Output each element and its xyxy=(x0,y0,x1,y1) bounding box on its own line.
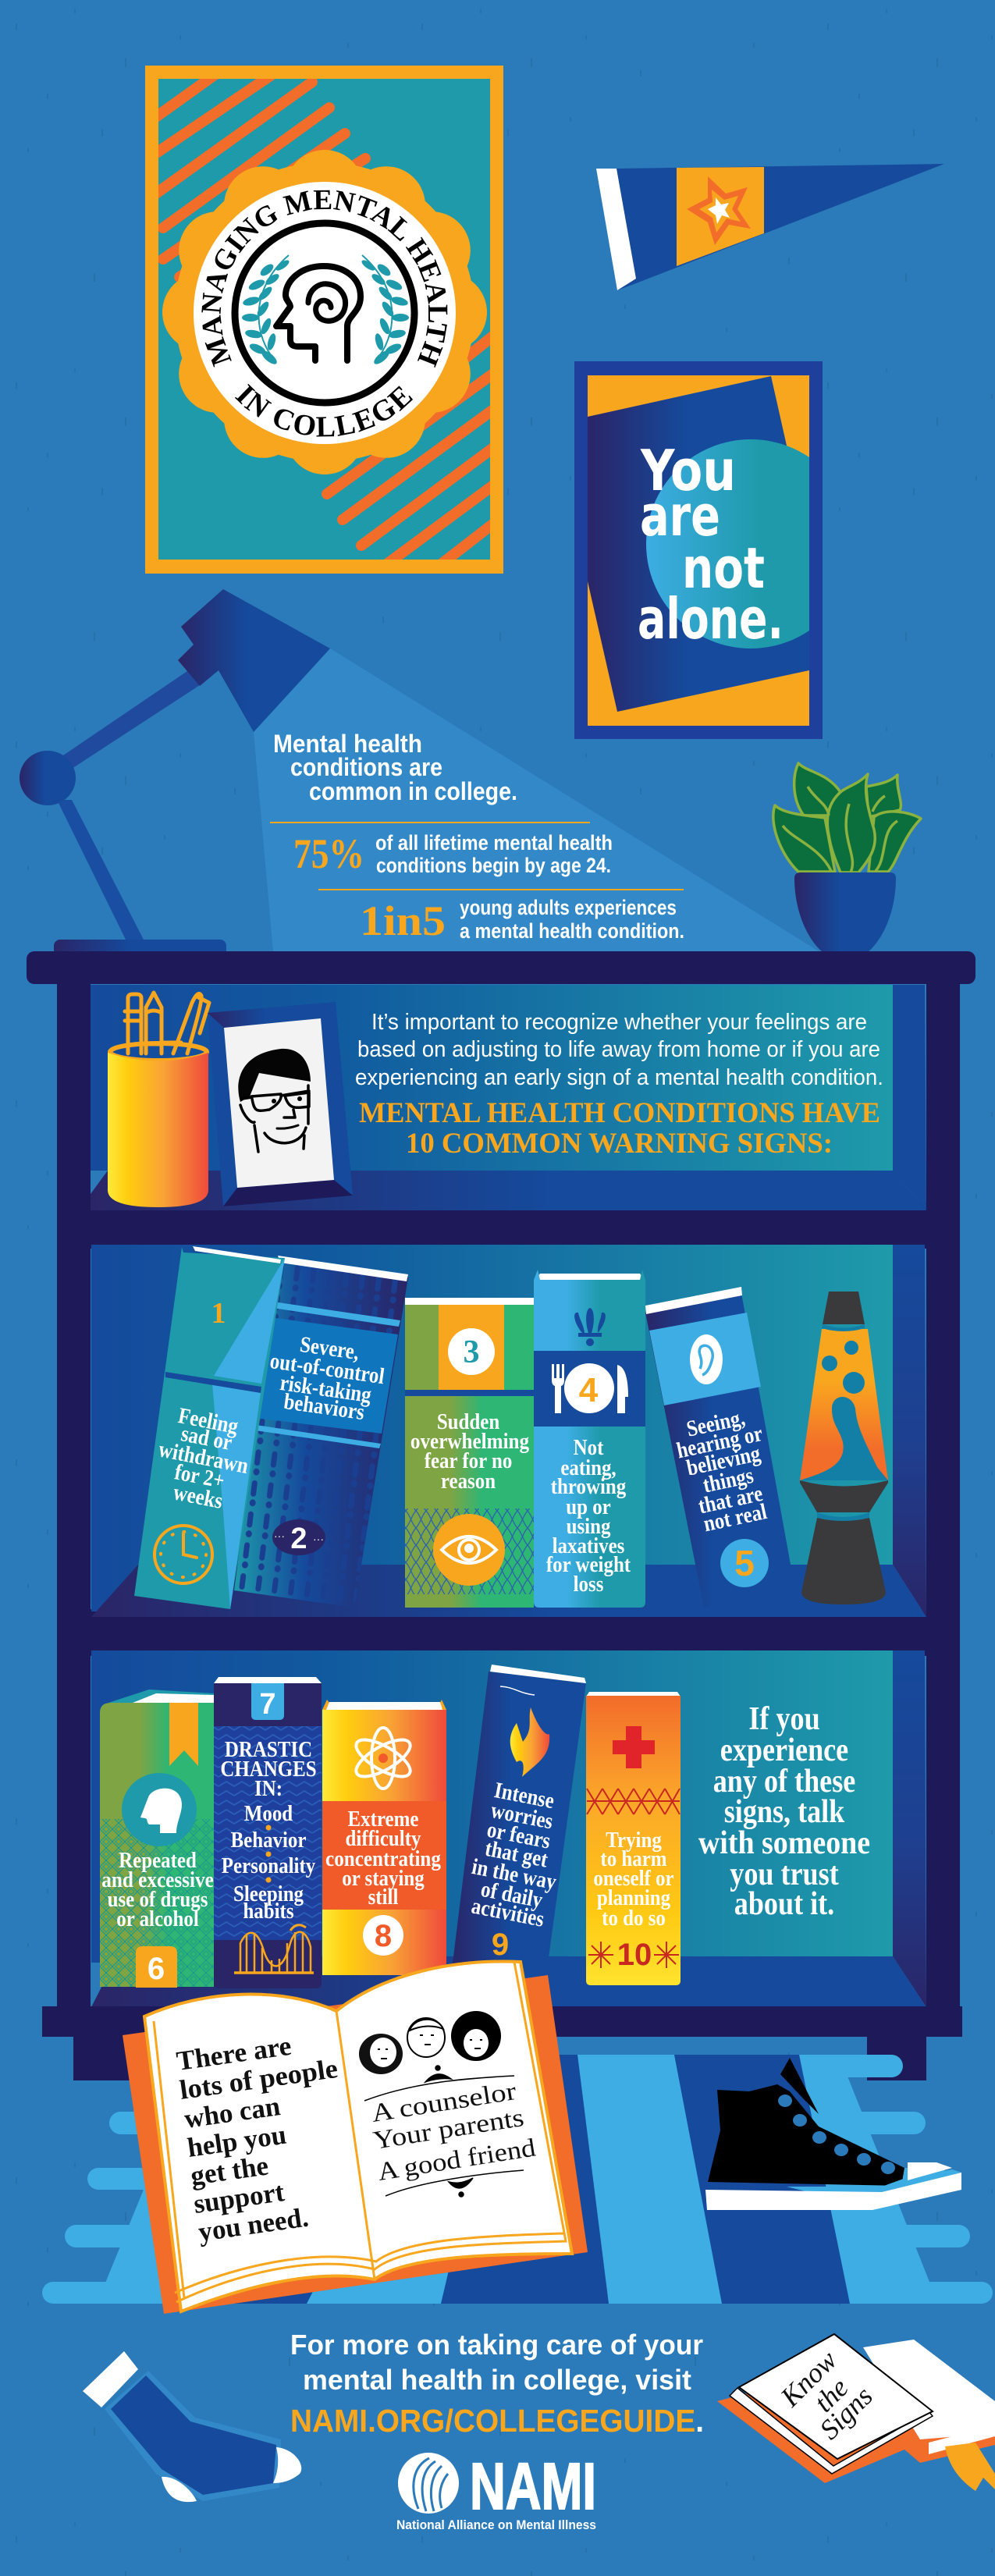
book 5 text xyxy=(674,1405,769,1537)
book 1 text: sad or xyxy=(179,1420,234,1455)
right page list: Your parents xyxy=(371,2104,526,2155)
book 4 text: loss xyxy=(574,1571,603,1596)
book 2 text: risk-taking xyxy=(279,1370,373,1408)
book 10 text: to do so xyxy=(602,1905,666,1930)
book 8 text: difficulty xyxy=(346,1825,421,1850)
statistics text block: conditions are xyxy=(290,753,442,781)
left page text: who can xyxy=(183,2091,282,2134)
book 2: risk-taking xyxy=(234,1256,408,1608)
footer text: For more on taking care of your xyxy=(290,2329,703,2361)
stat: 75 percent: conditions begin by age 24. xyxy=(376,854,611,877)
icon: red cross xyxy=(613,1726,655,1768)
book 10 text: Trying xyxy=(606,1827,662,1852)
book pages xyxy=(144,1962,572,2311)
book 8 text: still xyxy=(368,1884,399,1909)
book 5 number: 5 xyxy=(734,1543,755,1583)
poster lettering: alone. xyxy=(638,586,784,652)
intro paragraph: based on adjusting to life away from home or if you are xyxy=(357,1037,880,1062)
book 7 text: CHANGES xyxy=(220,1756,317,1781)
shelf 3 interior xyxy=(91,1650,926,2007)
book 1 text xyxy=(157,1402,251,1513)
photo frame with portrait xyxy=(208,1002,353,1206)
book 8 number: 8 xyxy=(375,1919,392,1953)
book 7 text: IN: xyxy=(254,1775,283,1800)
book 3 text: overwhelming xyxy=(410,1428,530,1453)
book 4 text: throwing xyxy=(551,1473,627,1498)
poster lettering: You xyxy=(640,438,736,503)
notebook lettering: the xyxy=(808,2372,855,2418)
stat: 1 in 5: 1in5 xyxy=(360,897,446,944)
book 9 text: of daily xyxy=(479,1876,545,1913)
logo tagline: National Alliance on Mental Illness xyxy=(396,2517,596,2532)
right page list xyxy=(370,2077,538,2187)
book 6 text: or alcohol xyxy=(116,1906,199,1931)
ribbon xyxy=(945,2443,995,2491)
warning signs heading: MENTAL HEALTH CONDITIONS HAVE xyxy=(359,1097,880,1129)
book 8 number xyxy=(363,1915,403,1956)
book 6 text xyxy=(101,1847,214,1931)
helper faces xyxy=(359,2011,501,2074)
ornaments xyxy=(364,2066,524,2197)
book 10 text: to harm xyxy=(600,1846,667,1871)
icon: potted plant xyxy=(773,763,921,952)
book 10 number: 10 xyxy=(617,1938,652,1972)
book 5 text: hearing or xyxy=(674,1420,765,1463)
book 4 text: Not xyxy=(574,1434,603,1459)
portrait face xyxy=(238,1049,311,1152)
book 9: intense worries xyxy=(450,1665,586,1998)
book 10 text: planning xyxy=(597,1885,671,1910)
book 8 text: Extreme xyxy=(348,1806,418,1831)
bottom board of bookcase xyxy=(42,2006,962,2037)
icon: atom xyxy=(351,1728,415,1789)
book 5 number xyxy=(720,1539,769,1587)
book 8: difficulty concentrating xyxy=(322,1700,446,1975)
icon: flame xyxy=(510,1707,549,1777)
book 9 text xyxy=(470,1777,559,1931)
book 2 text: out-of-control xyxy=(268,1348,386,1389)
book 2 number: ··· xyxy=(313,1533,324,1545)
book 3 text: Sudden xyxy=(437,1409,499,1434)
book 1 text: for 2+ xyxy=(172,1459,226,1493)
book 4 number: 4 xyxy=(579,1371,599,1409)
call to action text: experience xyxy=(720,1732,848,1768)
left page text xyxy=(175,2031,339,2247)
left page text: support xyxy=(192,2176,286,2219)
book 8 text: or staying xyxy=(342,1865,425,1890)
intro paragraph: It’s important to recognize whether your feelings are xyxy=(371,1010,867,1035)
decorative red bursts xyxy=(588,1942,679,1968)
book 10 text xyxy=(593,1827,674,1930)
book 1 number: 1 xyxy=(211,1297,226,1330)
book 5 text: things xyxy=(701,1462,755,1498)
warning signs heading xyxy=(359,1097,880,1160)
icon: roller coaster xyxy=(234,1925,314,1973)
book 3 text: reason xyxy=(441,1468,496,1493)
book 3: sudden fear xyxy=(405,1298,534,1608)
stat: 1 in 5 xyxy=(360,896,684,944)
notebook lettering: Know xyxy=(774,2344,843,2413)
book 9 text: Intense xyxy=(492,1777,556,1814)
icon: pencil cup xyxy=(108,993,209,1207)
badge title arc text: MANAGING MENTAL HEALTH xyxy=(201,190,448,368)
left page text: help you xyxy=(186,2119,288,2163)
intro paragraph: experiencing an early sign of a mental health condition. xyxy=(355,1065,883,1090)
rug fringe xyxy=(42,2055,993,2304)
book 9 text: that get xyxy=(483,1835,550,1872)
icon: plate and cutlery xyxy=(552,1363,628,1413)
poster lettering xyxy=(638,438,784,652)
icon: head with spiral xyxy=(276,266,361,361)
book 3 number xyxy=(448,1328,495,1375)
footer text: NAMI.ORG/COLLEGEGUIDE. xyxy=(290,2403,704,2439)
book 4 text: laxatives xyxy=(553,1533,624,1558)
pennant flag xyxy=(596,164,944,290)
logo mark xyxy=(398,2453,459,2514)
poster lettering: are xyxy=(640,483,720,549)
warning signs heading: 10 COMMON WARNING SIGNS: xyxy=(406,1128,833,1160)
book 7 text: Personality xyxy=(222,1853,316,1878)
shelf 2 interior xyxy=(91,1245,926,1617)
poster lettering: not xyxy=(682,535,765,601)
footer text xyxy=(290,2329,704,2439)
left page text: There are xyxy=(175,2031,293,2077)
book 2 text: Severe, xyxy=(298,1331,361,1365)
plant leaves xyxy=(773,763,921,872)
call to action text: about it. xyxy=(734,1886,834,1922)
shelf 1 interior xyxy=(91,985,926,1210)
desk lamp xyxy=(20,589,330,956)
book 5 text: not real xyxy=(702,1498,769,1537)
book 8 text: concentrating xyxy=(325,1846,441,1871)
book 9 text: in the way xyxy=(470,1853,559,1895)
book 6 text: and excessive xyxy=(101,1867,214,1892)
stat: 75 percent xyxy=(293,830,613,877)
call to action text: you trust xyxy=(730,1856,839,1892)
book 2 text xyxy=(268,1331,386,1425)
call to action text: with someone xyxy=(698,1825,870,1861)
book 2 number: ··· xyxy=(274,1530,285,1542)
book 4 text: eating, xyxy=(560,1455,617,1480)
poster: Managing Mental Health in College xyxy=(145,66,503,574)
book 5 text: that are xyxy=(696,1480,765,1519)
icon: lava lamp xyxy=(800,1292,888,1604)
rug xyxy=(42,2055,993,2304)
notebook lettering: Signs xyxy=(813,2380,879,2446)
poster: You are not alone xyxy=(574,361,823,739)
book 7 text: Sleeping xyxy=(233,1881,304,1906)
book 7 text: Behavior xyxy=(231,1827,306,1852)
statistics text block: Mental health xyxy=(273,730,422,758)
icon: laurel wreath xyxy=(242,255,409,367)
book 2 number: 2 xyxy=(290,1523,307,1555)
book 6: drugs or alcohol xyxy=(100,1690,214,1988)
book 6 number xyxy=(136,1946,177,1988)
book 10 text: oneself or xyxy=(593,1865,674,1890)
book 8 text xyxy=(325,1806,441,1909)
book 7: drastic changes xyxy=(214,1677,322,1988)
open book xyxy=(123,1962,588,2314)
book 5: seeing hearing xyxy=(645,1287,795,1608)
book 3 text: fear for no xyxy=(425,1448,512,1473)
book 7 text xyxy=(220,1736,317,1923)
icon: crown xyxy=(574,1308,606,1346)
book 6 text: Repeated xyxy=(119,1847,197,1872)
book 1: feeling sad xyxy=(134,1246,285,1609)
book 1 text: Feeling xyxy=(176,1402,240,1439)
logo wordmark: NAMI xyxy=(470,2450,596,2523)
call to action text: If you xyxy=(748,1701,820,1737)
stat: 75 percent: of all lifetime mental health xyxy=(375,831,613,855)
sneaker xyxy=(705,2058,961,2210)
book 9 text: or fears xyxy=(485,1817,553,1853)
book 1 text: withdrawn xyxy=(157,1437,251,1478)
book 9 text: activities xyxy=(470,1893,546,1931)
call to action text xyxy=(698,1701,870,1922)
right page list: A counselor xyxy=(370,2077,518,2128)
book 9 text: worries xyxy=(489,1797,555,1834)
badge white disc and ring xyxy=(194,182,456,444)
book 4 text: up or xyxy=(566,1494,611,1519)
bookcase frame xyxy=(27,951,975,2080)
book 7 text: Mood xyxy=(244,1800,293,1825)
stat: 1 in 5: a mental health condition. xyxy=(460,919,684,943)
icon: sock xyxy=(83,2351,301,2502)
icon: ear xyxy=(690,1334,723,1384)
statistics text block: common in college. xyxy=(309,777,517,805)
icon: pennant star xyxy=(687,176,751,245)
book 4 text: using xyxy=(567,1513,611,1538)
book 4: not eating xyxy=(534,1270,645,1608)
poster diagonal stripes xyxy=(148,75,499,567)
book 6 number: 6 xyxy=(147,1952,165,1986)
stat: 75 percent: 75% xyxy=(293,830,364,877)
book 7 number tab xyxy=(251,1683,284,1721)
call to action text: any of these xyxy=(713,1764,855,1800)
icon: clock xyxy=(155,1526,212,1583)
small notebook: Know the Signs xyxy=(717,2334,995,2491)
book 3 text xyxy=(410,1409,530,1493)
statistics text block xyxy=(270,730,684,944)
left page text: lots of people xyxy=(178,2053,339,2105)
plant pot xyxy=(794,872,896,952)
left page text: get the xyxy=(189,2150,270,2191)
notebook lettering xyxy=(774,2344,879,2446)
book 1 text: weeks xyxy=(172,1480,225,1513)
NAMI logo xyxy=(396,2450,596,2532)
left page text: you need. xyxy=(197,2202,311,2247)
book 9 number: 9 xyxy=(492,1928,509,1962)
book 4 text: for weight xyxy=(546,1551,631,1576)
book 5 text: Seeing, xyxy=(684,1405,747,1441)
book 6 text: use of drugs xyxy=(108,1886,208,1911)
book 10: harm oneself xyxy=(586,1692,681,1985)
stat: 1 in 5: young adults experiences xyxy=(460,896,677,919)
book 7 text: habits xyxy=(243,1898,294,1923)
right page list: A good friend xyxy=(376,2134,538,2187)
book 7 number tab: 7 xyxy=(259,1688,276,1721)
call to action text: signs, talk xyxy=(724,1794,844,1830)
book 2 text: behaviors xyxy=(283,1388,366,1425)
badge scalloped seal xyxy=(162,150,487,474)
badge subtitle arc text: IN COLLEGE xyxy=(235,384,413,437)
book 2 number xyxy=(272,1519,325,1555)
decorative red band xyxy=(587,1789,680,1814)
intro paragraph xyxy=(355,1010,883,1090)
icon: eye xyxy=(433,1514,505,1586)
book 3 number: 3 xyxy=(464,1334,479,1370)
lamp light beam xyxy=(254,648,819,951)
icon: head with scattering particles xyxy=(122,1773,197,1846)
book 5 text: believing xyxy=(684,1441,763,1480)
book 4 text xyxy=(546,1434,631,1596)
book 7 text: DRASTIC xyxy=(225,1736,312,1761)
footer text: mental health in college, visit xyxy=(303,2364,691,2396)
sneaker eyelets xyxy=(778,2095,895,2174)
